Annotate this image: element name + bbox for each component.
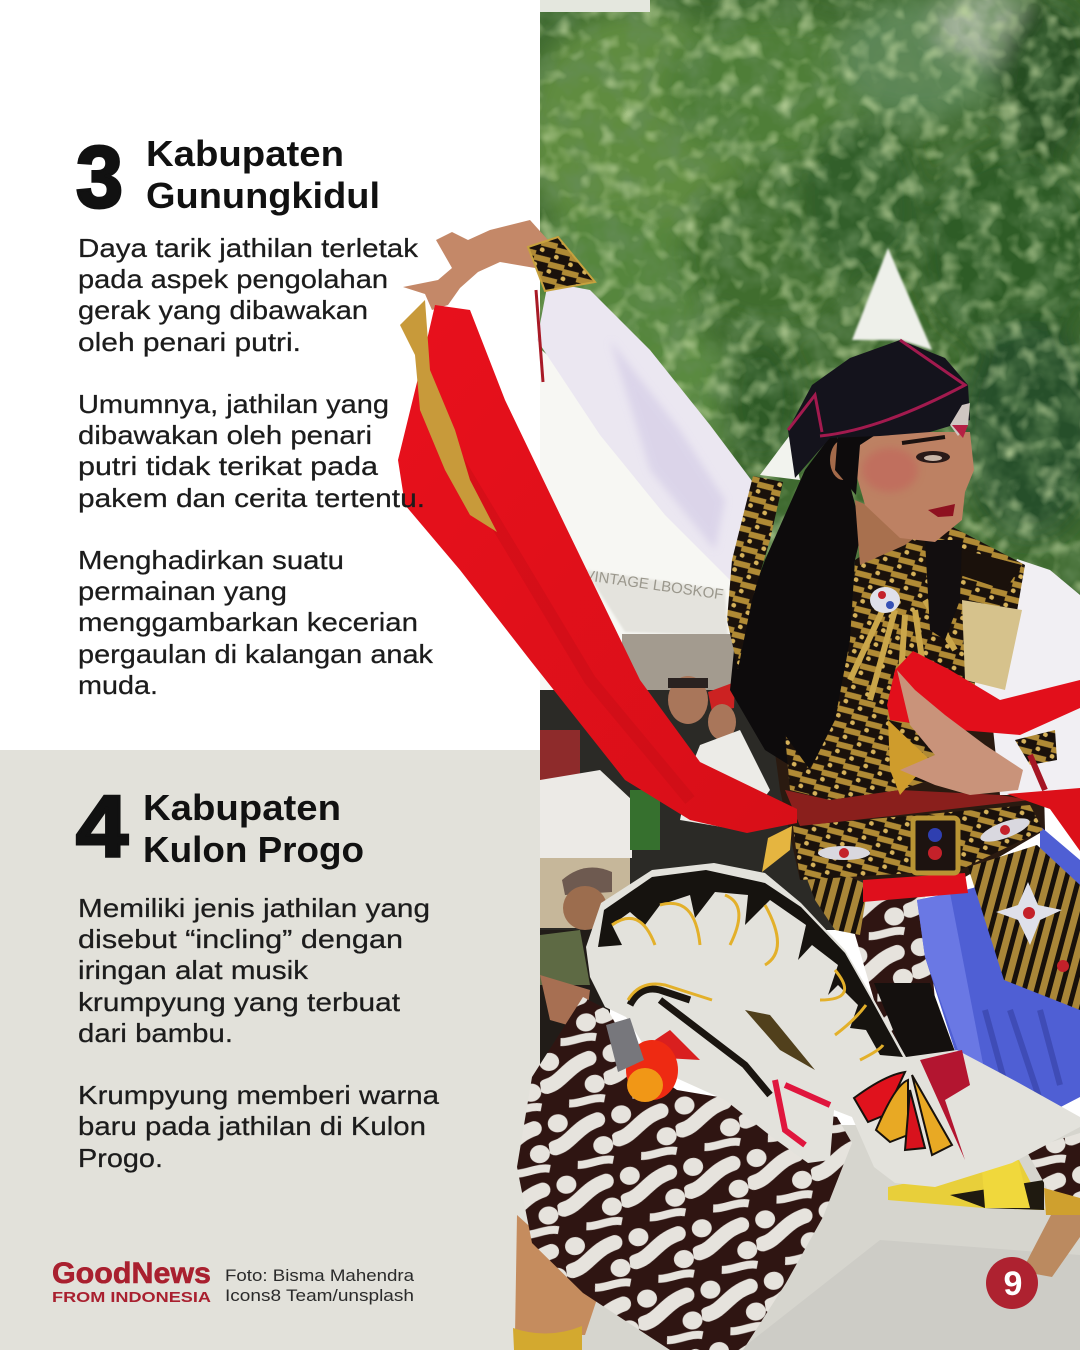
far anklet and batik [1026,1133,1080,1200]
paragraph 1: dari bambu. [78,1018,233,1048]
photo credit: Foto: Bisma Mahendra [225,1266,415,1285]
paragraph 3: pergaulan di kalangan anak [78,639,434,669]
lips [928,504,955,517]
paragraph 2: Krumpyung memberi warna [78,1080,440,1110]
raised sleeve [537,282,755,580]
heading [146,133,380,216]
number 3: 3 [76,129,123,226]
heading [143,787,364,870]
eye [902,437,950,463]
neck [855,500,925,565]
crowd [540,676,863,1064]
tent banner: VINTAGE LBOSKOF [583,567,724,603]
paragraph 1: Memiliki jenis jathilan yang [78,893,430,923]
long red scarf [398,305,797,833]
head wrap [788,340,970,478]
black mane [598,870,903,1057]
dancer [398,220,1080,1350]
paragraph 2 [78,1080,440,1173]
ear [830,440,856,480]
flower ornament [996,882,1062,945]
waist red [785,790,1030,826]
cuff [528,237,595,291]
far foot [1026,1213,1080,1277]
page number badge: 9 [1004,1265,1022,1303]
feather embroidery [850,600,955,700]
tail feathers [854,1050,970,1160]
heading: Gunungkidul [146,175,380,216]
red belt [863,873,968,902]
batik skirt [517,997,852,1350]
gold hip fabric [797,853,868,935]
cutout [745,1010,815,1070]
paragraph 3: menggambarkan kecerian [78,607,418,637]
long hair behind [730,430,862,775]
logo: GoodNews from Indonesia: GoodNews [52,1257,211,1290]
photo credit: Icons8 Team/unsplash [225,1286,414,1305]
paragraph 1: disebut “incling” dengan [78,924,403,954]
red scarf in hand [887,651,1080,735]
paragraph 1: oleh penari putri. [78,327,301,357]
scarf gold fringe [400,300,497,532]
gold outlines [612,895,883,1060]
vest [785,523,1030,826]
ground [540,1125,1080,1350]
paragraph 2 [78,389,425,513]
panel: white text background [0,0,540,750]
vest flower [870,587,900,613]
face [845,432,974,542]
far right sleeve [960,559,1080,795]
heading: Kabupaten [143,787,341,828]
page number badge [986,1257,1038,1309]
tape clip [606,1018,644,1072]
decorated waist belt [793,805,1043,880]
section 3: Kabupaten Gunungkidul [76,129,434,700]
number 4: 4 [76,778,128,875]
beaded fringe on vest [962,600,1022,690]
red tassel string [536,290,543,382]
yellow cloth on ground [888,1160,1045,1210]
paragraph 3: permainan yang [78,576,287,606]
paragraph 1 [78,893,430,1048]
logo: GoodNews from Indonesia: FROM INDONESIA [52,1289,211,1306]
trees [515,0,1080,600]
gold panel [968,845,1080,1010]
heading: Kulon Progo [143,829,364,870]
paragraph 2: dibawakan oleh penari [78,420,372,450]
yellow sash [762,826,792,872]
paragraph 2: putri tidak terikat pada [78,451,379,481]
paragraph 3: Menghadirkan suatu [78,545,344,575]
seated man in cap [562,868,612,895]
lower hand [897,670,1023,795]
anklet [513,1326,582,1350]
gold tassel [888,720,930,795]
tent [852,248,932,350]
horse mouth [775,1080,830,1145]
lower right red scarf [1007,788,1080,851]
photo credit [225,1266,415,1305]
paragraph 1: krumpyung yang terbuat [78,987,401,1017]
hobby horse [586,863,1080,1187]
batik trousers [845,895,957,1057]
hair over neck right [925,540,962,640]
hair by temple [835,432,880,495]
horse eye [655,1030,700,1060]
paragraph 2: Progo. [78,1143,163,1173]
shoulder fringe [727,476,783,669]
raised hand [403,220,548,310]
logo: GoodNews from Indonesia [52,1257,211,1306]
panel: grey text background [0,750,540,1350]
near leg [515,1215,600,1335]
horse head line [630,989,770,1095]
paragraph 1: pada aspek pengolahan [78,264,388,294]
blue cloth [917,826,1080,1140]
heading: Kabupaten [146,133,344,174]
photo background: trees, tent, crowd, ground [515,0,1080,1350]
paragraph 2: baru pada jathilan di Kulon [78,1111,426,1141]
torso underlay [760,640,1045,880]
paragraph 2: Umumnya, jathilan yang [78,389,389,419]
paragraph 1: gerak yang dibawakan [78,295,368,325]
wrist band [1015,730,1057,765]
paragraph 1 [78,233,419,357]
sky [540,0,650,12]
section 4: Kabupaten Kulon Progo [76,778,440,1173]
paragraph 1: Daya tarik jathilan terletak [78,233,419,263]
paragraph 3 [78,545,434,700]
paragraph 3: muda. [78,670,158,700]
building [622,634,734,690]
pompom [626,1040,678,1100]
paragraph 2: pakem dan cerita tertentu. [78,483,425,513]
paragraph 1: iringan alat musik [78,955,309,985]
